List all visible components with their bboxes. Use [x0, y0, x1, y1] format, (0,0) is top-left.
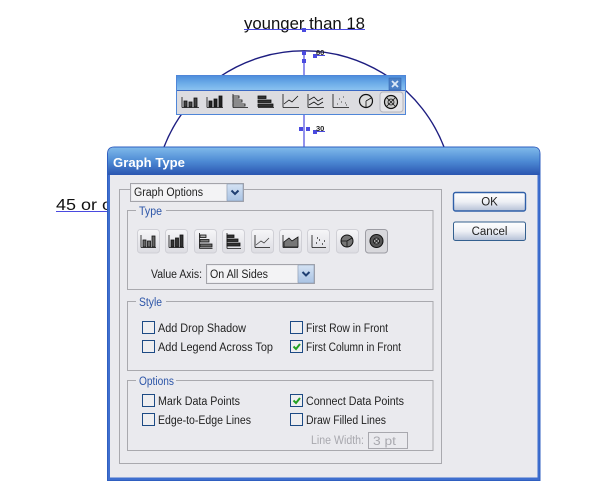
- control: Line Width field, disabled: [311, 432, 408, 448]
- checkbox: First Column in Front, checked: [290, 340, 402, 354]
- button: Cancel: Cancel: [472, 226, 507, 238]
- control: Line Width field, disabled: 3 pt: [373, 436, 397, 448]
- control: Value Axis dropdown: [206, 264, 314, 284]
- panel: floating graph toolbar: [176, 76, 406, 114]
- heading: younger than 18: younger than 18: [244, 15, 365, 33]
- checkbox: Draw Filled Lines: [290, 414, 386, 427]
- heading: 45 or older, cut off by the dialog: 45 or older: [56, 197, 143, 214]
- button: Cancel: [454, 222, 526, 240]
- checkbox: Add Legend Across Top: Add Legend Across Top: [158, 342, 273, 354]
- axis label: 30: 30: [316, 124, 324, 133]
- checkbox: Edge-to-Edge Lines: Edge-to-Edge Lines: [158, 415, 251, 427]
- control: Line Width field, disabled: Line Width:: [311, 435, 364, 447]
- checkbox: Draw Filled Lines: Draw Filled Lines: [306, 415, 386, 427]
- control: Graph Options dropdown: Graph Options: [134, 187, 203, 199]
- heading: Type: Type: [139, 206, 162, 218]
- icons: graph type buttons: [138, 230, 388, 253]
- button: OK: OK: [481, 196, 498, 208]
- heading: Options: Options: [139, 376, 174, 388]
- button: OK: [454, 192, 526, 211]
- axis label: 60: 60: [316, 48, 324, 57]
- checkbox: Mark Data Points: Mark Data Points: [158, 396, 240, 408]
- control: Value Axis label: Value Axis:: [151, 269, 202, 281]
- checkbox: First Row in Front: [290, 322, 389, 335]
- control: Value Axis dropdown: On All Sides: [210, 269, 268, 281]
- checkbox: First Column in Front, checked: First Column in Front: [306, 342, 402, 354]
- panel: Options group: [128, 374, 433, 450]
- icons: toolbar graph tools: [182, 94, 398, 108]
- heading: Style: Style: [139, 297, 162, 309]
- chart: radar outline behind the dialogs: [164, 51, 444, 147]
- panel: Type group: [128, 204, 433, 290]
- panel: Graph Options group: [120, 190, 442, 464]
- checkbox: Add Drop Shadow: Add Drop Shadow: [158, 323, 247, 335]
- heading: dialog title: Graph Type: [113, 155, 185, 170]
- checkbox: First Row in Front: First Row in Front: [306, 323, 389, 335]
- icon: toolbar close button: [389, 78, 401, 90]
- control: Graph Options dropdown: [130, 184, 244, 202]
- panel: Graph Type dialog: [108, 147, 540, 480]
- panel: Style group: [128, 295, 433, 370]
- checkbox: Connect Data Points, checked: Connect Data Points: [306, 396, 404, 408]
